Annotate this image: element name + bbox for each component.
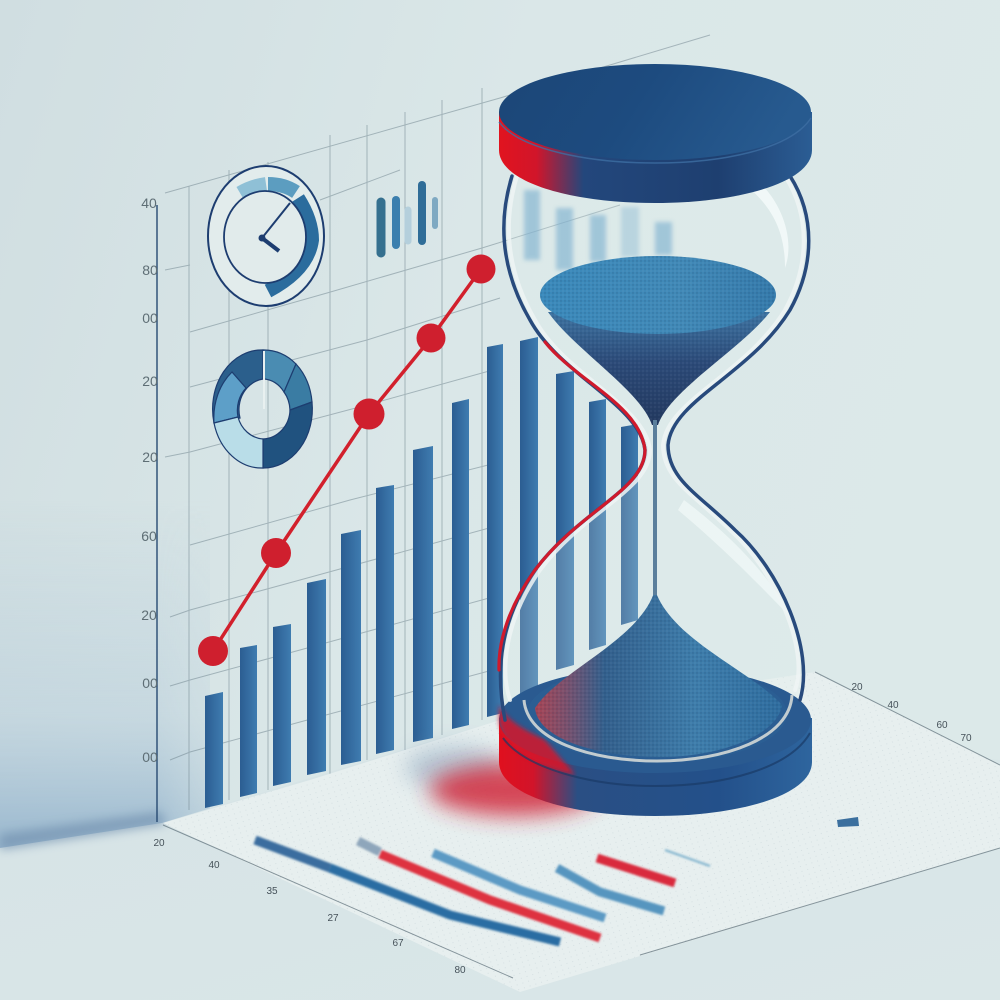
lower sand [535,590,782,757]
paper labels: 20 [851,682,863,693]
paper labels: 27 [327,913,339,924]
y axis labels: 40 [141,195,157,211]
paper labels: 40 [208,860,220,871]
paper labels: 67 [392,938,404,949]
glass highlights [678,185,793,620]
mini bar chart [381,185,435,253]
y axis labels: 20 [142,373,158,389]
paper labels: 60 [936,720,948,731]
y axis labels: 60 [141,528,157,544]
paper bars [255,840,710,942]
y axis labels: 20 [141,607,157,623]
shadow blue [405,746,505,790]
paper labels: 20 [153,838,165,849]
y axis [156,205,158,822]
upper sand [540,256,776,425]
bars [205,337,638,808]
floor edge shadow [0,812,166,850]
paper labels: 35 [266,886,278,897]
y axis labels: 00 [142,749,158,765]
floor [0,720,1000,1000]
y axis labels: 20 [142,449,158,465]
glass bulb [500,176,809,720]
y axis labels [141,195,158,765]
faded bars behind upper glass [524,190,672,270]
hourglass [499,64,812,816]
paper labels: 80 [454,965,466,976]
paper sheet [163,672,1000,992]
red glass edge [499,342,645,670]
base inner rim [524,695,792,761]
y axis labels: 00 [142,310,158,326]
clock hands [262,203,290,238]
donut needle [263,351,265,409]
red trend line [198,254,496,666]
hourglass base [499,665,812,816]
paper labels: 40 [887,700,899,711]
wall shade lower left [0,598,210,848]
paper labels: 70 [960,733,972,744]
y axis labels: 00 [142,675,158,691]
chart grid [165,35,710,810]
gauge clock icon [208,166,324,306]
shadow under hourglass [430,764,600,816]
donut chart [213,350,312,468]
glass frame [499,176,809,720]
y axis labels: 80 [142,262,158,278]
falling sand stream [653,420,657,595]
top disc [499,64,812,203]
paper labels [153,682,972,976]
gauge ring segments [240,184,312,291]
small paper mark [837,817,859,827]
